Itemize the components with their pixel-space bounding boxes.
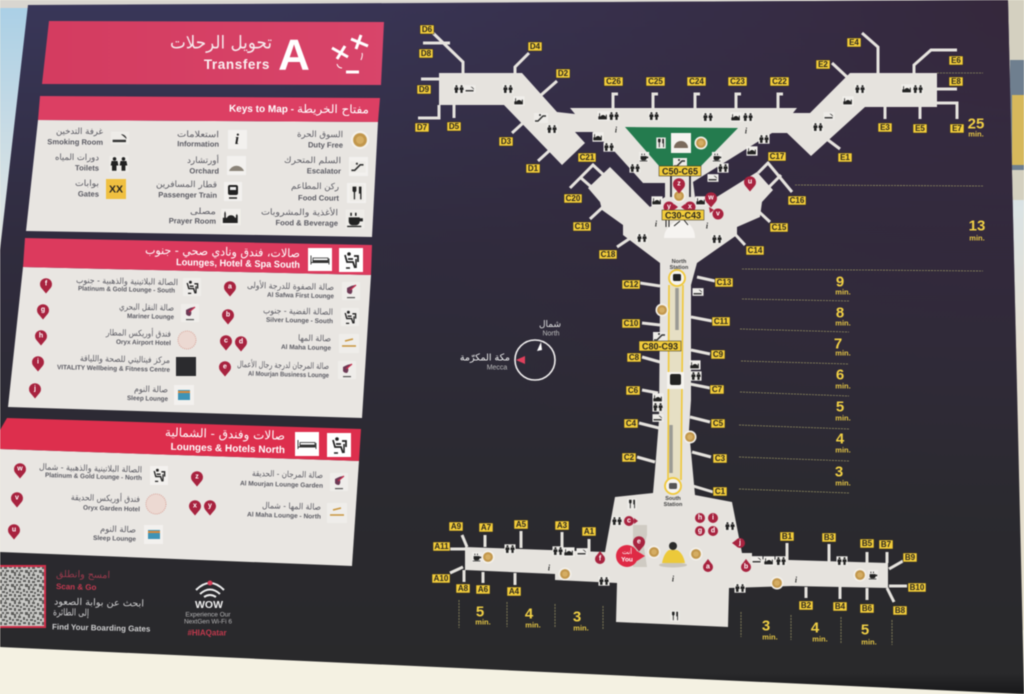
- key: Food Court: [291, 182, 366, 203]
- walking time scale: right side: 8: [836, 304, 844, 322]
- gate labels: concourse D: [415, 25, 570, 173]
- heading: Transfers: Transfers: [204, 57, 270, 72]
- entry: i VITALITY Wellbeing and Fitness Centre: VITALITY Wellbeing & Fitness Centre: [57, 364, 170, 374]
- gate labels: concourse A: A8: [458, 584, 469, 593]
- entry: x y Al Maha Lounge North: y: [208, 502, 212, 510]
- gate labels: concourse E: E8: [951, 77, 961, 86]
- location pins on the map: d: [711, 528, 715, 534]
- key: Passenger Train: قطار المسافرين: [156, 180, 217, 190]
- statue: yellow figure: [659, 542, 687, 568]
- key: Toilets: Toilets: [75, 163, 99, 173]
- entry: h Oryx Airport Hotel: h: [39, 332, 43, 340]
- gate labels: concourse C: C26: [606, 77, 621, 86]
- marker: You are here: أنت: [622, 547, 632, 556]
- location pins on the map: v: [716, 210, 720, 218]
- panel: Lounges, Hotel and Spa South: [8, 238, 372, 418]
- entry: c d Al Maha Lounge: صالة المها: [298, 334, 331, 344]
- gate labels: concourse C: C13: [717, 278, 732, 287]
- location pins on the map: e: [637, 538, 641, 546]
- entry: a Al Safwa First Lounge: a: [228, 284, 232, 290]
- heading: Lounges, Hotel and Spa South: Lounges, Hotel & Spa South: [176, 257, 300, 271]
- gate labels: concourse C: C19: [575, 222, 590, 231]
- key: Gates: بوابات: [75, 179, 99, 189]
- gate labels: concourse C: C23: [730, 77, 745, 86]
- walking time scale: concourse B: min.: [861, 638, 877, 646]
- key: Information: [177, 130, 247, 149]
- key: Passenger Train: Passenger Train: [158, 190, 217, 200]
- gate labels: concourse C: C15: [772, 223, 787, 232]
- heading: Keys to Map: [229, 102, 369, 117]
- location pins on the map: g: [698, 528, 702, 534]
- entry: i VITALITY Wellbeing and Fitness Centre: مركز فيتاليتي للصحة واللياقة: [80, 354, 170, 366]
- entry: z Al Mourjan Lounge Garden: [191, 469, 348, 491]
- gate labels: concourse C: C30-C43: [665, 210, 701, 220]
- walking time scale: concourse A: min.: [475, 618, 491, 626]
- location pins on the map: b: [744, 564, 748, 570]
- entry: e Al Mourjan Business Lounge: [219, 359, 356, 379]
- WOW Wi-Fi block: NextGen Wi-Fi 6: [184, 618, 232, 626]
- gate labels: concourse A: A11: [434, 542, 449, 551]
- key: Smoking Room: غرفة التدخين: [56, 127, 104, 137]
- location pins on the map: u: [748, 178, 752, 186]
- entry: i VITALITY Wellbeing and Fitness Centre: i: [37, 358, 39, 366]
- entry: v Oryx Garden Hotel: v: [15, 494, 19, 502]
- walking time scale: right side: min.: [835, 446, 851, 454]
- key: Prayer Room: [169, 207, 241, 226]
- entry: g Mariner Lounge: g: [41, 306, 45, 314]
- facility icons on the map: i: [745, 126, 748, 136]
- walking time scale: right side: [739, 73, 985, 493]
- entry: f Platinum and Gold Lounge South: f: [45, 280, 48, 288]
- walking time scale: right side: min.: [835, 318, 851, 328]
- gate labels: concourse C: C9: [713, 350, 724, 359]
- walking time scale: concourse B: [741, 612, 892, 646]
- location pins on the map: j: [738, 540, 741, 546]
- key: Information: Information: [177, 139, 219, 149]
- walking time scale: right side: min.: [835, 382, 851, 390]
- entry: w Platinum and Gold Lounge North: w: [16, 466, 23, 472]
- gate labels: concourse E: [816, 38, 964, 162]
- walking time scale: concourse B: 3: [762, 618, 770, 634]
- gate labels: concourse D: D6: [422, 25, 433, 34]
- label: South Station: Station: [664, 502, 683, 508]
- location pins on the map: [595, 176, 756, 572]
- heading: Keys to Map: Keys to Map -: [229, 104, 294, 115]
- gate labels: concourse C: C2: [624, 453, 635, 462]
- gate labels: concourse A: A3: [557, 521, 568, 530]
- entry: g Mariner Lounge: [37, 302, 199, 322]
- key: Smoking Room: [47, 127, 129, 147]
- walking time scale: concourse B: 5: [861, 622, 869, 638]
- entry: a Al Safwa First Lounge: [224, 280, 360, 300]
- entry: x y Al Maha Lounge North: صالة المها - شمال: [262, 501, 321, 513]
- gate labels: concourse E: E6: [951, 56, 961, 65]
- walking time scale: concourse A: min.: [525, 620, 541, 630]
- gate labels: concourse B: [780, 532, 926, 615]
- heading: Lounges and Hotels North: [165, 425, 285, 456]
- marker: You are here: [616, 525, 647, 567]
- key: Prayer Room: مصلى: [190, 207, 216, 217]
- panel: Lounges and Hotels North: [0, 418, 361, 566]
- gate labels: concourse E: E2: [818, 60, 828, 69]
- gate labels: concourse A: A9: [451, 522, 462, 531]
- entry: v Oryx Garden Hotel: Oryx Garden Hotel: [83, 505, 140, 513]
- walking time scale: concourse A: 5: [476, 604, 484, 620]
- key: Duty Free: السوق الحرة: [297, 130, 343, 140]
- gate labels: concourse C: C21: [580, 153, 595, 162]
- text block: Scan and Go: امسح وانطلق: [56, 569, 110, 581]
- walking time scale: right side: 7: [834, 336, 842, 352]
- gate labels: concourse C: C25: [648, 77, 663, 86]
- key: Gates: [75, 179, 126, 199]
- entry: f Platinum and Gold Lounge South: الصالة البلاتينية والذهبية - جنوب: [76, 276, 178, 288]
- entry: j Sleep Lounge: Sleep Lounge: [127, 395, 168, 403]
- entry: b Silver Lounge South: الصالة الفضية - جنوب: [263, 306, 333, 318]
- gate labels: concourse A: A10: [434, 574, 449, 583]
- entry: x y Al Maha Lounge North: Al Maha Lounge - North: [247, 511, 321, 521]
- entry: f Platinum and Gold Lounge South: Platinum & Gold Lounge - South: [78, 285, 175, 295]
- gate labels: concourse B: B5: [862, 539, 873, 548]
- gate labels: concourse C: C22: [772, 77, 787, 86]
- gate labels: concourse C: C14: [748, 246, 763, 255]
- gate labels: concourse B: B8: [895, 606, 906, 615]
- key: Passenger Train: [156, 180, 242, 201]
- entry: j Sleep Lounge: j: [33, 386, 36, 392]
- key: Food Court: ركن المطاعم: [291, 182, 339, 192]
- entry: g Mariner Lounge: Mariner Lounge: [127, 313, 174, 321]
- gate labels: concourse C: C16: [790, 196, 805, 205]
- key: Escalator: Escalator: [307, 166, 341, 176]
- location pins on the map: y: [667, 204, 671, 210]
- walking time scale: right side: 3: [835, 464, 843, 480]
- gate labels: concourse C: C20: [566, 194, 581, 203]
- key: Duty Free: [297, 130, 369, 150]
- label: North Station: Station: [670, 265, 689, 271]
- gate labels: concourse D: D5: [449, 122, 460, 131]
- key: Duty Free: Duty Free: [308, 140, 343, 150]
- walking time scale: right side: min.: [835, 414, 851, 422]
- location pins on the map: i: [712, 514, 714, 522]
- icon: wifi: [196, 580, 224, 597]
- gate labels: concourse C: C11: [714, 317, 729, 326]
- walking time scale: concourse A: 3: [573, 608, 581, 626]
- key: Food and Beverage: الأغذية والمشروبات: [261, 207, 338, 218]
- walking time scale: right side: 5: [836, 398, 844, 416]
- entry: x y Al Maha Lounge North: x: [193, 502, 197, 510]
- location pins on the map: x: [688, 204, 692, 210]
- text block: Scan and Go: ابحث عن بوابة الصعود: [54, 596, 144, 610]
- compass: North and Mecca: مكة المكرّمة: [460, 352, 510, 364]
- entry: e Al Mourjan Business Lounge: e: [223, 364, 227, 370]
- entry: e Al Mourjan Business Lounge: Al Mourjan Business Lounge: [248, 371, 329, 379]
- gate stubs: [418, 33, 957, 602]
- facility icons on the map: i: [548, 564, 551, 572]
- gate labels: concourse B: B6: [862, 604, 873, 613]
- panel: Keys to Map: [26, 96, 380, 237]
- entry: e Al Mourjan Business Lounge: صالة المرجان لدرجة رجال الأعمال: [237, 359, 329, 372]
- key: Gates: Gates: [78, 189, 99, 199]
- panel: Transfers title: [42, 21, 384, 85]
- walking time scale: right side: min.: [835, 288, 851, 296]
- gate labels: concourse D: D9: [419, 85, 430, 94]
- icon: bed: [295, 432, 319, 456]
- gate labels: concourse E: E3: [880, 123, 890, 132]
- gate labels: concourse C: C7: [712, 385, 723, 394]
- gate labels: concourse B: B1: [782, 532, 793, 541]
- gate labels: concourse D: D1: [528, 164, 539, 173]
- gate labels: concourse C: C24: [689, 77, 704, 86]
- location pins on the map: h: [698, 514, 702, 522]
- entry: w Platinum and Gold Lounge North: Platinum & Gold Lounge - North: [45, 472, 142, 482]
- compass: North and Mecca: North: [542, 330, 560, 338]
- entry: x y Al Maha Lounge North: [189, 500, 347, 523]
- facility icons on the map: [453, 84, 924, 622]
- walking time scale: concourse B: 4: [811, 620, 820, 636]
- location pins on the map: z: [677, 180, 681, 188]
- compass: North and Mecca: [460, 320, 561, 380]
- entry: v Oryx Garden Hotel: [11, 491, 166, 514]
- gate labels: concourse B: B4: [835, 602, 846, 611]
- text block: Scan and Go: إلى الطائرة: [53, 607, 89, 619]
- key: Food and Beverage: Food & Beverage: [276, 218, 338, 228]
- entry: g Mariner Lounge: صالة النقل البحري: [119, 302, 174, 314]
- walking time scale: right side: min.: [968, 130, 984, 138]
- gate labels: concourse D: D4: [530, 42, 541, 51]
- entry: z Al Mourjan Lounge Garden: z: [195, 474, 199, 480]
- gate labels: concourse E: E4: [849, 38, 859, 47]
- key: Orchard: أورتشارد: [187, 154, 219, 166]
- walking time scale: right side: min.: [969, 234, 985, 242]
- gate labels: concourse C: C12: [624, 280, 639, 289]
- gate labels: concourse C: C18: [601, 250, 616, 259]
- gate labels: concourse D: D2: [558, 69, 569, 78]
- location pins on the map: f: [599, 556, 602, 562]
- walking time scale: concourse A: 4: [525, 606, 534, 622]
- entry: u Sleep Lounge: Sleep Lounge: [93, 535, 136, 543]
- entry: j Sleep Lounge: [29, 383, 194, 405]
- heading: Lounges and Hotels North: صالات وفندق - الشمالية: [165, 425, 285, 444]
- compass: North and Mecca: شمال: [539, 320, 561, 330]
- gate labels: concourse E: E5: [915, 124, 925, 133]
- entry: h Oryx Airport Hotel: فندق أوريكس المطار: [105, 326, 171, 340]
- entry: f Platinum and Gold Lounge South: [40, 276, 201, 296]
- gate labels: concourse B: B10: [910, 583, 925, 592]
- entry: h Oryx Airport Hotel: Oryx Airport Hotel: [116, 339, 171, 347]
- key: Toilets: [55, 153, 129, 173]
- gate labels: concourse C: C17: [770, 152, 785, 161]
- gate labels: concourse A: A5: [516, 520, 527, 529]
- gate labels: concourse C: C8: [629, 353, 640, 362]
- gate labels: concourse D: D3: [501, 137, 512, 146]
- WOW Wi-Fi block: #HIAQatar: [187, 628, 227, 638]
- gate labels: concourse C: [564, 77, 806, 496]
- entry: c d Al Maha Lounge: [220, 334, 359, 353]
- walking time scale: concourse A: [459, 600, 603, 632]
- compass: North and Mecca: Mecca: [487, 364, 507, 372]
- walking time scale: concourse B: min.: [812, 634, 828, 644]
- key: Food Court: Food Court: [298, 193, 340, 203]
- text block: Scan and Go: [52, 569, 151, 634]
- text block: Scan and Go: Find Your Boarding Gates: [52, 622, 151, 634]
- map: airport floor plan: [415, 25, 964, 627]
- gate labels: concourse B: B3: [824, 533, 835, 542]
- key: Smoking Room: Smoking Room: [47, 137, 103, 147]
- WOW Wi-Fi block: WOW: [195, 599, 223, 611]
- walking time scale: right side: 6: [836, 366, 844, 384]
- dome: central atrium: [664, 220, 695, 238]
- gate labels: concourse C: C3: [715, 454, 726, 463]
- WOW Wi-Fi block: [184, 580, 232, 638]
- gate labels: concourse C: C4: [626, 419, 637, 428]
- heading: concourse letter A: A: [278, 30, 310, 80]
- gate labels: concourse A: A6: [478, 585, 489, 594]
- icon: transfer planes: [332, 35, 368, 72]
- entry: z Al Mourjan Lounge Garden: صالة المرجان - الحديقة: [252, 469, 323, 481]
- heading: Arabic transfers: تحويل الرحلات: [170, 32, 272, 54]
- gate labels: concourse A: A1: [584, 527, 595, 536]
- gate labels: concourse A: A4: [509, 587, 520, 596]
- facility icons on the map: i: [706, 222, 709, 230]
- gate labels: concourse B: B2: [801, 601, 812, 610]
- entry: u Sleep Lounge: [8, 524, 163, 544]
- walking time scale: right side: 4: [836, 430, 845, 448]
- heading: Keys to Map: مفتاح الخريطة: [297, 102, 369, 117]
- heading: Lounges and Hotels North: Lounges & Hotels North: [170, 442, 285, 456]
- key: Information: استعلامات: [177, 130, 219, 140]
- entry: c d Al Maha Lounge: d: [239, 338, 243, 346]
- walking time scale: right side: 25: [968, 116, 984, 132]
- QR code: [0, 565, 46, 628]
- facility icons on the map: i: [655, 220, 658, 228]
- entry: z Al Mourjan Lounge Garden: Al Mourjan Lounge Garden: [240, 480, 323, 490]
- entry: a Al Safwa First Lounge: Al Safwa First Lounge: [267, 292, 334, 300]
- key: Information: i: [235, 132, 240, 148]
- entry: c d Al Maha Lounge: c: [224, 338, 228, 344]
- icon: lounge chair: [339, 248, 363, 272]
- gate labels: concourse C: C1: [715, 487, 726, 496]
- facility icons on the map: i: [672, 574, 675, 584]
- walking time scale: concourse A: min.: [573, 624, 589, 632]
- label: North Station: North: [672, 259, 686, 265]
- entry: w Platinum and Gold Lounge North: الصالة البلاتينية والذهبية - شمال: [39, 462, 142, 476]
- entry: w Platinum and Gold Lounge North: [14, 462, 168, 485]
- gate labels: concourse C: C6: [628, 386, 639, 395]
- entry: a Al Safwa First Lounge: صالة الصفوة للدرجة الأولى: [247, 280, 334, 293]
- heading: Lounges, Hotel and Spa South: صالات، فندق ونادي صحي - جنوب: [145, 243, 300, 261]
- facility icons on the map: i: [795, 576, 798, 584]
- marker: You are here: You: [621, 556, 633, 564]
- key: Prayer Room: Prayer Room: [169, 216, 216, 226]
- gate labels: concourse A: A7: [481, 523, 492, 532]
- location pins on the map: a: [706, 564, 710, 570]
- key: Gates: XX: [109, 184, 123, 196]
- location pins on the map: w: [707, 194, 714, 202]
- gate labels: concourse C: C10: [624, 319, 639, 328]
- entry: j Sleep Lounge: صالة النوم: [134, 385, 168, 395]
- gate labels: concourse C: C50-C65: [662, 166, 698, 176]
- gate labels: concourse D: D8: [421, 49, 432, 58]
- location pins on the map: c: [627, 518, 631, 524]
- key: Escalator: السلم المتحرك: [284, 156, 341, 166]
- entry: i VITALITY Wellbeing and Fitness Centre: [32, 354, 196, 376]
- gate labels: concourse B: B7: [881, 540, 892, 549]
- floor: C central wings and pier: [465, 167, 888, 627]
- key: Orchard: [187, 154, 246, 176]
- entry: c d Al Maha Lounge: Al Maha Lounge: [281, 344, 331, 352]
- walking time scale: right side: min.: [835, 478, 851, 488]
- walking time scale: right side: min.: [835, 348, 851, 358]
- gate labels: concourse B: B9: [905, 553, 916, 562]
- gate labels: concourse A: [432, 520, 596, 596]
- WOW Wi-Fi block: Experience Our: [185, 612, 231, 618]
- key: Escalator: [284, 156, 368, 176]
- text block: Scan and Go: Scan & Go: [56, 582, 97, 592]
- gate labels: concourse C: C80-C93: [642, 342, 678, 352]
- label: South Station: South: [665, 496, 681, 502]
- gate labels: concourse C: C5: [713, 419, 724, 428]
- icon: lounge chair: [327, 433, 351, 457]
- entry: v Oryx Garden Hotel: فندق أوريكس الحديقة: [71, 491, 140, 505]
- walking time scale: right side: 9: [836, 274, 844, 290]
- walking time scale: right side: 13: [969, 218, 985, 234]
- key: Orchard: Orchard: [189, 166, 219, 176]
- entry: b Silver Lounge South: Silver Lounge - South: [266, 317, 333, 325]
- icon: bed: [308, 248, 332, 271]
- heading: Lounges, Hotel and Spa South: [145, 243, 300, 271]
- entry: b Silver Lounge South: b: [226, 312, 230, 318]
- key: Food and Beverage: [261, 207, 364, 228]
- entry: b Silver Lounge South: [222, 306, 359, 326]
- walking time scale: concourse B: min.: [762, 632, 778, 642]
- facility icons on the map: i: [615, 126, 618, 134]
- gate labels: concourse D: D7: [417, 123, 428, 132]
- key: Toilets: دورات المياه: [55, 153, 99, 163]
- entry: u Sleep Lounge: u: [12, 526, 16, 534]
- gate labels: concourse E: E7: [952, 124, 962, 133]
- gate labels: concourse E: E1: [840, 153, 850, 162]
- floor: D, C upper and E concourses: [439, 73, 937, 197]
- green zone: Orchard: [625, 127, 738, 167]
- entry: h Oryx Airport Hotel: [35, 326, 196, 349]
- entry: u Sleep Lounge: صالة النوم: [100, 524, 136, 536]
- rail: passenger train line: [665, 270, 685, 494]
